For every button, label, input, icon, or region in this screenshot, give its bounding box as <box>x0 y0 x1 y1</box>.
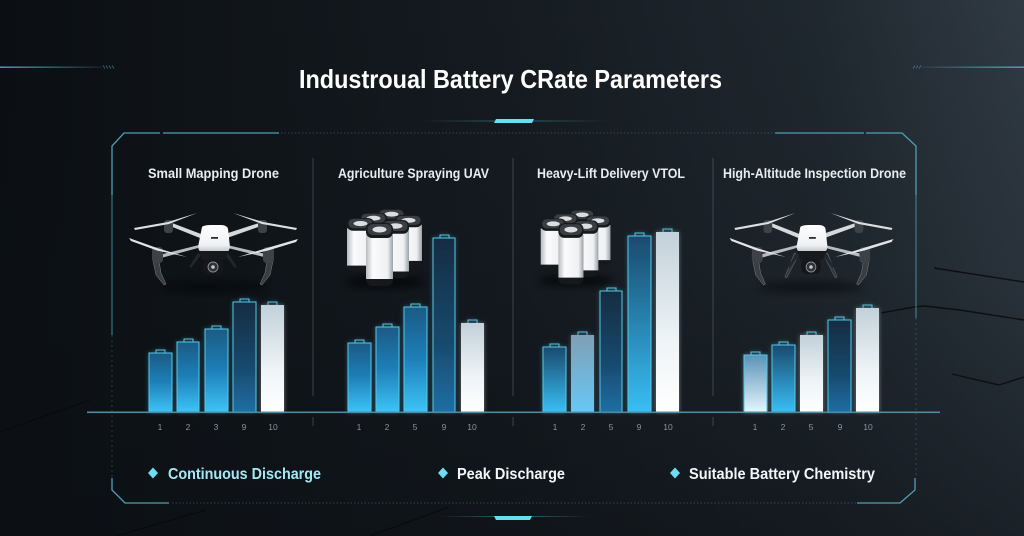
column: Heavy-Lift Delivery VTOL <box>537 166 685 432</box>
axis labels: 9 <box>637 422 642 432</box>
heading: Small Mapping Drone <box>148 166 279 181</box>
axis labels: 1 <box>753 422 758 432</box>
axis labels <box>553 422 673 432</box>
axis labels <box>357 422 477 432</box>
heading: High-Altitude Inspection Drone <box>723 166 906 181</box>
column: High-Altitude Inspection Drone <box>723 166 906 432</box>
title accent tick <box>420 119 610 123</box>
icon: battery pack <box>539 210 613 286</box>
column dividers <box>313 158 713 426</box>
axis labels: 10 <box>663 422 673 432</box>
axis labels: 10 <box>863 422 873 432</box>
chart baseline axis <box>87 412 940 413</box>
axis labels: 2 <box>581 422 586 432</box>
icon: white inspection drone <box>730 213 893 293</box>
bottom accent tick <box>440 516 590 520</box>
legend <box>148 466 875 483</box>
axis labels <box>753 422 873 432</box>
axis labels: 10 <box>268 422 278 432</box>
decorative header line right <box>913 66 1024 68</box>
legend item: Continuous Discharge: Continuous Discharge <box>168 466 321 483</box>
axis labels: 2 <box>781 422 786 432</box>
heading: Heavy-Lift Delivery VTOL <box>537 166 685 181</box>
legend item: Peak Discharge: Peak Discharge <box>457 466 565 483</box>
axis labels: 1 <box>553 422 558 432</box>
axis labels: 5 <box>413 422 418 432</box>
heading: Agriculture Spraying UAV <box>338 166 489 181</box>
axis labels: 2 <box>385 422 390 432</box>
axis labels <box>158 422 278 432</box>
outer frame <box>112 133 916 503</box>
column: Small Mapping Drone <box>129 166 298 432</box>
title: Industroual Battery CRate Parameters <box>299 64 722 94</box>
axis labels: 9 <box>838 422 843 432</box>
axis labels: 9 <box>442 422 447 432</box>
axis labels: 1 <box>158 422 163 432</box>
icon: battery pack <box>345 209 425 288</box>
icon: white quadcopter drone <box>129 213 298 293</box>
legend item: Suitable Battery Chemistry: Suitable Battery Chemistry <box>689 466 875 483</box>
bar chart <box>543 229 679 412</box>
axis labels: 2 <box>186 422 191 432</box>
axis labels: 5 <box>809 422 814 432</box>
bar chart <box>348 235 484 412</box>
bar chart <box>744 305 879 412</box>
axis labels: 10 <box>467 422 477 432</box>
axis labels: 9 <box>242 422 247 432</box>
axis labels: 1 <box>357 422 362 432</box>
axis labels: 3 <box>214 422 219 432</box>
column: Agriculture Spraying UAV <box>338 166 489 432</box>
decorative header line left <box>0 66 114 68</box>
bar chart <box>149 299 284 412</box>
axis labels: 5 <box>609 422 614 432</box>
